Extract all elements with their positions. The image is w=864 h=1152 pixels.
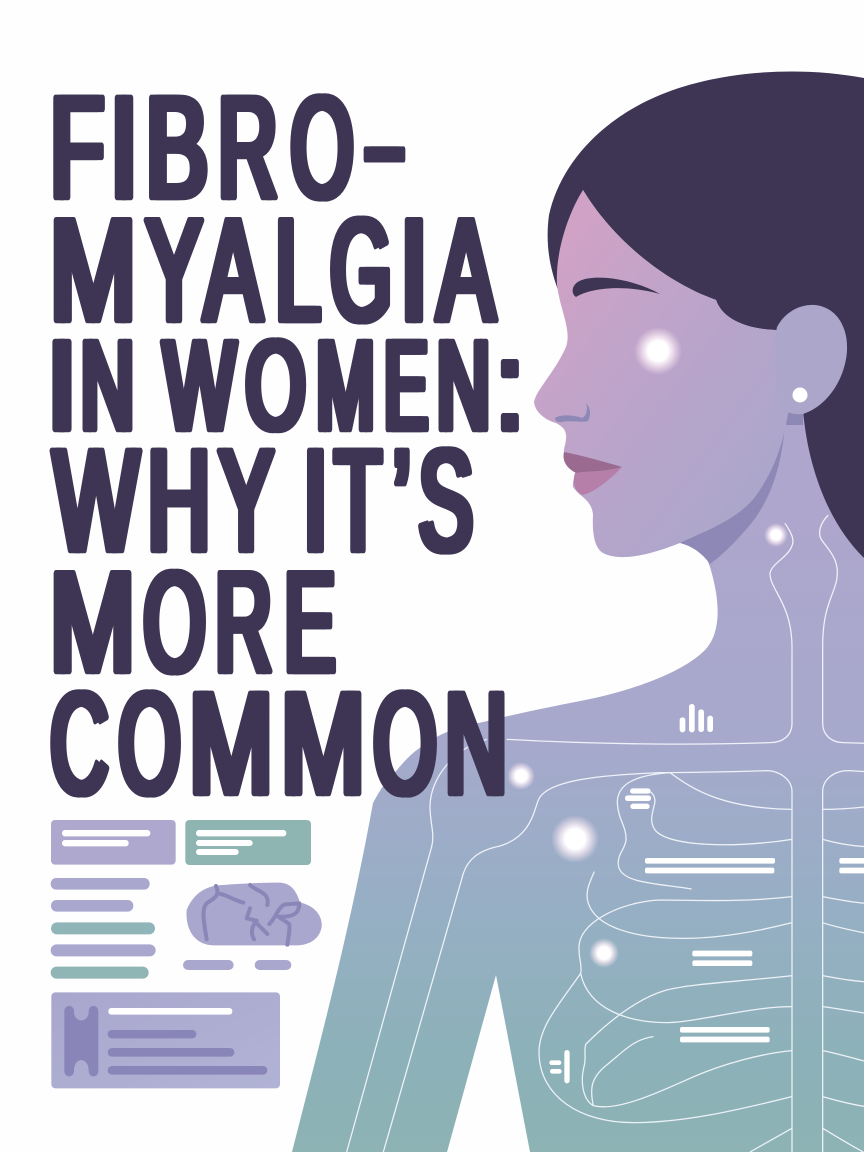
glow: shoulder large — [551, 815, 599, 863]
title: C — [48, 663, 106, 824]
title: – — [365, 61, 399, 222]
rib lines left — [617, 773, 692, 889]
title: E — [382, 315, 425, 456]
icon: ticket shape — [64, 1006, 98, 1076]
title: I — [108, 67, 135, 228]
text lines mid rib — [692, 951, 752, 966]
title: W — [51, 420, 136, 581]
title — [46, 61, 520, 824]
title: E — [282, 543, 333, 702]
glow: cheek — [634, 327, 682, 375]
title: N — [78, 315, 132, 456]
spine right rail — [823, 771, 864, 1152]
lower lip — [574, 467, 622, 495]
title: Y — [217, 420, 269, 581]
nostril — [555, 403, 590, 422]
figure: woman in profile — [292, 71, 864, 1152]
title: A — [435, 189, 492, 351]
title: N — [434, 315, 488, 456]
panel: teal card — [185, 820, 311, 865]
title: F — [48, 67, 101, 228]
title: M — [187, 663, 270, 824]
title: T — [332, 420, 379, 581]
text lines chest — [645, 858, 775, 873]
spine left rail — [383, 771, 792, 1152]
rib lines right — [823, 807, 864, 809]
outer arm line — [347, 739, 487, 1152]
earring — [792, 388, 808, 402]
icon: map blob with fissures — [187, 883, 322, 945]
title: Y — [144, 189, 199, 351]
panel: summary card — [51, 992, 280, 1088]
title: M — [48, 189, 134, 351]
title: I — [46, 315, 73, 456]
title: N — [442, 663, 505, 824]
title: R — [216, 67, 275, 228]
glow: rib — [589, 938, 619, 968]
title: I — [398, 189, 425, 351]
panel: purple card — [51, 820, 176, 865]
ear — [774, 305, 847, 414]
title: G — [328, 189, 389, 351]
text lines lower rib — [680, 1027, 770, 1042]
neck shadow — [680, 405, 803, 564]
glow: shoulder small — [507, 762, 535, 790]
small text lines shoulder — [625, 788, 651, 809]
title: A — [202, 189, 259, 351]
list of pill bars — [51, 878, 156, 979]
pain glow points — [507, 327, 788, 968]
white data marks on body — [549, 704, 864, 1083]
eyebrow — [573, 278, 660, 297]
mini bar chart icon — [680, 704, 713, 732]
title: B — [144, 67, 206, 228]
title: M — [279, 663, 362, 824]
title: O — [288, 67, 351, 228]
upper lip — [564, 452, 622, 473]
body and neck silhouette — [292, 400, 864, 1152]
title: R — [213, 543, 269, 702]
text lines chest right — [839, 858, 864, 873]
title: O — [243, 315, 303, 456]
title: I — [301, 420, 325, 581]
caption pills — [183, 960, 291, 970]
title: S — [416, 420, 470, 581]
glow: neck — [764, 523, 788, 547]
title: ’ — [391, 420, 408, 581]
hair — [548, 71, 864, 558]
title: M — [314, 315, 372, 456]
title: O — [141, 543, 203, 702]
title: O — [116, 663, 178, 824]
title: O — [371, 663, 434, 824]
lower left info panels — [51, 820, 322, 1088]
title: H — [145, 420, 208, 581]
face — [534, 190, 790, 557]
neck nerves — [507, 523, 793, 744]
title: L — [273, 189, 318, 351]
nerve and rib lines — [347, 515, 864, 1152]
title: : — [495, 315, 520, 456]
small tick icon — [549, 1050, 570, 1083]
title: W — [161, 315, 233, 456]
title: M — [48, 543, 132, 702]
